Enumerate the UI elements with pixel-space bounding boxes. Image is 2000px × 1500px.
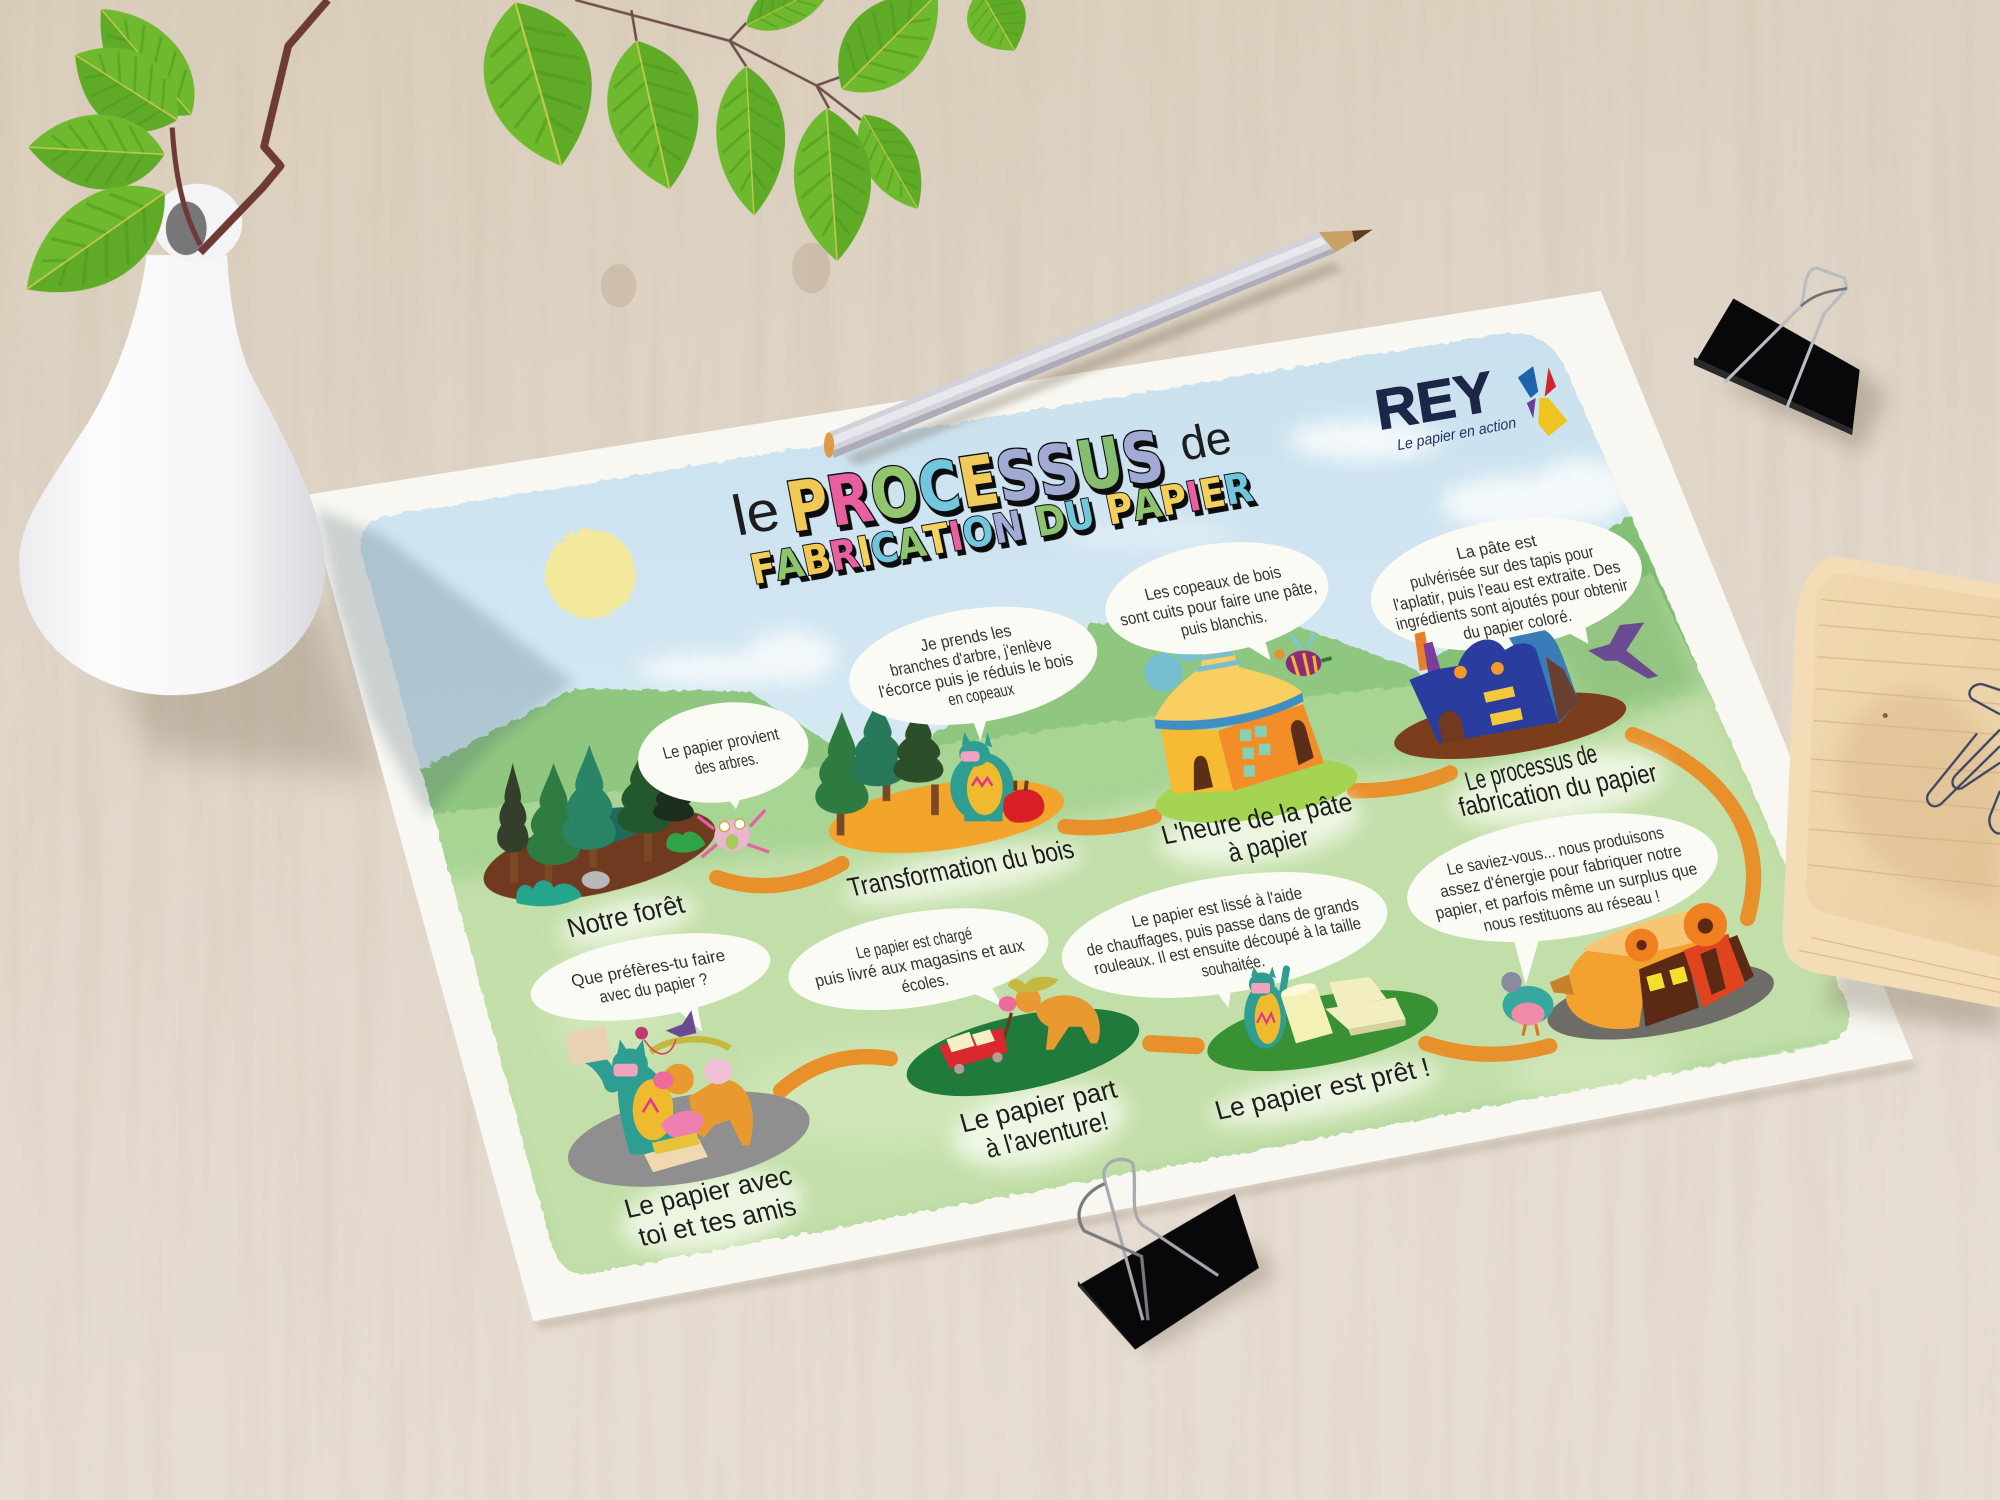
pencil [824, 230, 1372, 466]
label: Le papier avec toi et tes amis [621, 1160, 799, 1252]
label: Le papier part à l'aventure: Le papier part [956, 1073, 1120, 1138]
shadow of paper and objects on desk [115, 599, 1916, 1329]
bubble: Les copeaux de bois: sont cuits pour faire une pâte, [1118, 577, 1319, 629]
bubble: Je prends les branches: Je prends les [918, 621, 1014, 655]
title: de [1175, 412, 1236, 471]
bubble: Que préfères-tu faire: avec du papier ? [597, 969, 710, 1007]
scene: pulp house [1144, 631, 1362, 834]
bubble: Le saviez-vous: assez d'énergie pour fabriquer notre [1437, 840, 1684, 901]
bubble: La pâte est pulvérisée: l'aplatir, puis l'eau est extraite. Des [1391, 557, 1623, 615]
bubble: Le papier provient: Le papier provient [660, 724, 781, 763]
paper clips [1927, 684, 2000, 833]
character: origami bird [1588, 622, 1658, 679]
bubble: Que préfères-tu faire: Que préfères-tu faire [569, 945, 727, 991]
road segments [717, 735, 1754, 1091]
bubble: Les copeaux de bois: puis blanchis. [1178, 606, 1269, 640]
bubble: Le papier est lissé [1047, 851, 1406, 1033]
character: bee [1274, 634, 1332, 676]
bubble: Le papier est chargé: écoles. [899, 969, 951, 996]
bubble: Je prends les branches: l'écorce puis je réduis le bois [877, 649, 1075, 702]
scene: machine [1542, 903, 1780, 1054]
bubble: Le papier est chargé: Le papier est chargé [854, 924, 974, 962]
paper sheet [306, 291, 1913, 1321]
label: L'heure de la pâte à papier: à papier [1224, 821, 1312, 868]
binder clip: bottom [1078, 1159, 1276, 1352]
title: FABRICATION DU PAPIER [746, 463, 1257, 594]
binder clip: top right [1694, 268, 1888, 453]
bubble: Je prends les branches [835, 589, 1116, 760]
sun [546, 529, 635, 619]
bubble: Le papier provient [626, 690, 823, 823]
bubble: Le papier est chargé [777, 891, 1064, 1040]
scene: forest [475, 745, 724, 919]
bubble: La pâte est pulvérisée: La pâte est [1454, 531, 1538, 563]
title: PROCESSUS [780, 416, 1170, 548]
bubble: Le saviez-vous: nous restituons au réseau ! [1481, 886, 1662, 935]
bubble: Le papier est lissé: souhaitée. [1199, 951, 1267, 981]
bubble: Les copeaux de bois: Les copeaux de bois [1142, 562, 1283, 604]
bubble: Le papier provient: des arbres. [692, 748, 760, 778]
label: L'heure de la pâte à papier: L'heure de la pâte [1158, 787, 1356, 850]
scene: wood transformation [815, 699, 1069, 866]
logo: REY: Le papier en action [1396, 415, 1517, 454]
label: Le papier avec toi et tes amis: toi et tes amis [635, 1191, 799, 1252]
bubble: La pâte est pulvérisée: du papier coloré. [1461, 606, 1574, 643]
bubble: La pâte est pulvérisée [1355, 499, 1660, 678]
label: Le processus de fabrication du papier: fabrication du papier [1455, 757, 1660, 822]
vase [19, 184, 325, 695]
bubble: Le saviez-vous: papier, et parfois même un surplus que [1433, 859, 1699, 923]
label: Le papier part à l'aventure [956, 1073, 1120, 1164]
scene: paper delivery [899, 977, 1147, 1113]
wooden block [1783, 557, 2000, 1033]
bubble: Le papier est lissé: Le papier est lissé à l'aide [1130, 883, 1304, 931]
label: Notre forêt: Notre forêt [564, 888, 688, 943]
bubble: Le papier est lissé: de chauffages, puis passe dans de grands [1084, 894, 1361, 960]
scene: factory [1390, 630, 1630, 772]
bubble: Je prends les branches: en copeaux [946, 679, 1016, 709]
logo: REY: REY [1371, 360, 1498, 442]
character: pink frog [698, 810, 769, 857]
label glows [555, 737, 1671, 1267]
scene: paper ready [1201, 967, 1444, 1087]
bubble: Que préfères-tu faire [521, 918, 786, 1059]
bubble: La pâte est pulvérisée: ingrédients sont ajoutés pour obtenir [1394, 575, 1630, 634]
character: colourful bird [1501, 972, 1574, 1036]
label: Le processus de fabrication du papier: Le processus de [1461, 738, 1600, 796]
scene: friends group [561, 1010, 817, 1203]
title [727, 412, 1257, 594]
label: L'heure de la pâte à papier [1158, 787, 1356, 868]
bubble: La pâte est pulvérisée: pulvérisée sur des tapis pour [1407, 542, 1596, 592]
label: Le papier avec toi et tes amis: Le papier avec [621, 1160, 795, 1224]
illustrated art background: sky, hills and meadow [344, 319, 1875, 1288]
branch and leaves [3, 0, 1041, 325]
label: Le papier part à l'aventure: à l'aventure! [982, 1105, 1112, 1164]
bubble: Je prends les branches: branches d'arbre, j'enlève [888, 633, 1054, 680]
bubble: Le saviez-vous [1392, 792, 1743, 1000]
label: Le papier est prêt: Le papier est prêt ! [1211, 1052, 1433, 1126]
title: le [727, 479, 785, 548]
bubble: Le papier est lissé: rouleaux. Il est ensuite découpé à la taille [1092, 913, 1363, 978]
vase shadow cast across the paper [316, 508, 574, 816]
logo: REY [1371, 360, 1568, 454]
bubble: Le papier est chargé: puis livré aux magasins et aux [813, 935, 1026, 990]
label: Transformation du bois: Transformation du bois [844, 834, 1077, 902]
bubble: Les copeaux de bois [1092, 526, 1346, 685]
bubble: Le saviez-vous: Le saviez-vous... nous produisons [1445, 823, 1666, 879]
